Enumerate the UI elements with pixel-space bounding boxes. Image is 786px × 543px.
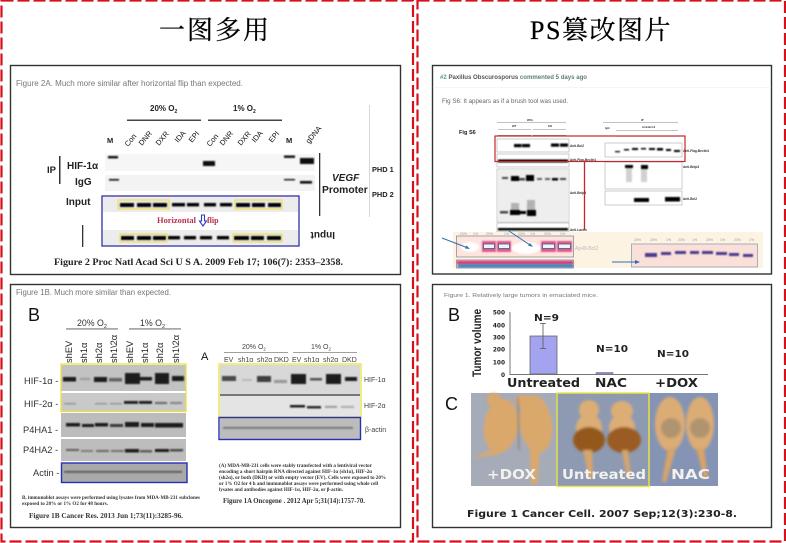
note A: or 1% O2 for 4 h and immunoblot assays were performed using whole cell (219, 481, 379, 487)
condition headers: DXR (154, 129, 171, 147)
blot: HIF-1α and IgG (105, 154, 315, 191)
blot labels: Input (310, 229, 335, 240)
blot labels: PHD 2 (372, 190, 394, 199)
frame: left dashed section (2, 0, 413, 542)
blot group B: 2 (104, 324, 107, 330)
condition headers: DNR (218, 129, 235, 147)
blot labels: VEGF (332, 173, 360, 184)
condition headers: EPI (267, 129, 281, 144)
western blot strips B (61, 365, 187, 482)
left blot stack: Anti-t-actin (570, 228, 587, 232)
y ticks (493, 310, 505, 379)
y ticks: 0 (501, 373, 505, 379)
enhanced image strip: 20% (460, 232, 467, 236)
blot group B: shEV (64, 340, 74, 363)
blot group A labels: sh2α (323, 357, 338, 364)
red highlight box and connector (495, 136, 685, 230)
left blot stack: IgG (605, 126, 610, 130)
note A (219, 462, 386, 493)
condition headers: 1% O (233, 104, 253, 113)
frame: right dashed section (418, 0, 785, 542)
enhanced image strip: 1% (504, 232, 509, 236)
category labels: Untreated (507, 376, 580, 390)
blot group A labels (224, 344, 386, 434)
note B: exposed to 20% or 1% O2 for 48 hours. (22, 501, 109, 507)
enhanced image strip: 20% (678, 238, 685, 242)
left blot stack: WT (512, 124, 517, 128)
blue box: input blots with flip (102, 196, 299, 246)
left blot stack: KO (548, 124, 553, 128)
condition headers: EPI (187, 129, 201, 144)
blot group A labels: 20% O (242, 344, 263, 351)
panel: Fig S6 comment (432, 66, 772, 274)
panel: Figure 1 mice (432, 284, 772, 528)
condition headers: 2 (253, 109, 256, 115)
photo: mice (471, 393, 718, 486)
y ticks: 300 (493, 336, 505, 342)
note A: lysates and antibodies against HIF-1α, HIF-2α, or β-actin. (219, 487, 344, 493)
condition headers: 2 (174, 109, 177, 115)
condition headers: Con (123, 132, 138, 148)
blot group A labels: 2 (263, 346, 266, 352)
condition headers: IDA (250, 129, 265, 144)
yellow highlight box (557, 393, 649, 486)
comment text: Fig S6: It appears as if a brush tool was used. (442, 98, 568, 105)
blot group A labels: sh1α (304, 357, 319, 364)
note A: (A) MDA-MB-231 cells were stably transfected with a lentiviral vector (219, 462, 373, 469)
arrows: blue annotations (442, 231, 640, 264)
panel: Figure 2A horizontal flip (10, 66, 400, 274)
condition headers: gDNA (304, 124, 323, 145)
left blot stack: Anti-Bnip3 (683, 165, 699, 169)
citation: Figure 1A: Figure 1A Oncogene . 2012 Apr 5;31(14):1757-70. (223, 498, 365, 505)
blot group A labels: sh1α (238, 357, 253, 364)
citation: Figure 1 Cancer Cell: Figure 1 Cancer Cell. 2007 Sep;12(3):230-8. (467, 509, 737, 520)
blot group A labels: β-actin (365, 427, 386, 434)
left blot stack: WCL (527, 118, 534, 122)
left blot stack: Anti-Flag-Beclin1 (570, 158, 596, 162)
enhanced image strip (453, 232, 763, 268)
note A: (sh2α), or both (DKD) or with empty vector (EV). Cells were exposed to 20% (219, 474, 386, 481)
bar: NAC (596, 372, 613, 374)
blot group B: sh2α (94, 342, 104, 363)
photo labels: +DOX (487, 467, 537, 483)
blot group A labels: sh2α (257, 357, 272, 364)
value labels: N=10 (657, 349, 689, 360)
blot group A labels: 2 (329, 346, 332, 352)
blot group A labels: EV (292, 357, 302, 364)
condition headers: IDA (173, 129, 188, 144)
citation: Figure 2: Figure 2 Proc Natl Acad Sci U S A. 2009 Feb 17; 106(7): 2353–2358. (54, 257, 344, 268)
value labels: N=9 (534, 313, 559, 324)
label Fig S6: Fig S6 (459, 130, 476, 136)
blot group B: sh1α (79, 342, 89, 363)
photo labels: Untreated (562, 467, 646, 483)
citation: Figure 1B: Figure 1B Cancer Res. 2013 Jun 1;73(11):3285-96. (29, 512, 183, 520)
blot labels: IP (47, 165, 57, 176)
enhanced image strip: 1% (530, 232, 535, 236)
note A: encoding a short hairpin RNA directed against HIF-1α (sh1α), HIF-2α (219, 468, 372, 475)
y ticks: 400 (493, 324, 505, 330)
blot group B (23, 318, 181, 478)
blot group A labels: HIF-1α (364, 377, 386, 384)
photo labels (487, 467, 710, 483)
condition headers: DXR (236, 129, 253, 147)
note B: B, immunoblot assays were performed using lysates from MDA-MB-231 subclones (22, 495, 200, 501)
blot labels: PHD 1 (372, 165, 394, 174)
blot labels (47, 153, 394, 247)
y ticks: 100 (493, 360, 505, 366)
blot group A labels: DKD (274, 357, 289, 364)
enhanced image strip: 1% (692, 238, 697, 242)
caption: Figure 2A: Figure 2A. Much more similar after horizontal flip than expected. (16, 79, 243, 88)
condition headers: 20% O (150, 104, 174, 113)
blot group B: 20% O (77, 318, 104, 328)
category labels: +DOX (655, 376, 699, 390)
condition headers: Con (205, 132, 220, 148)
panel letter B: B (448, 305, 460, 325)
panel letter C: C (445, 394, 458, 414)
enhanced image strip: 1% (720, 238, 725, 242)
enhanced image strip: 1% (749, 238, 754, 242)
condition headers: M (286, 136, 292, 145)
enhanced image strip: 20% (650, 238, 657, 242)
highlight boxes B (61, 364, 187, 482)
blot group B: 2 (162, 324, 165, 330)
blot group B: sh1α (140, 342, 150, 363)
flip label: Horizontal (157, 216, 197, 225)
y axis title: Tumor volume (470, 309, 484, 377)
heading: right column: PS篡改图片 (530, 16, 672, 45)
value labels: N=10 (596, 344, 628, 355)
left blot stack: Anti-Bcl2 (570, 144, 584, 148)
error bar (540, 323, 546, 348)
condition headers: M (107, 136, 113, 145)
panel letter A: A (201, 351, 209, 363)
enhanced image strip: 1% (560, 232, 565, 236)
enhanced image strip: 1% (473, 232, 478, 236)
left blot stack (497, 118, 709, 232)
enhanced image strip: Ap49-Bcl2 (575, 246, 598, 252)
blue box: input blots with flip: flip (207, 216, 219, 225)
left blot stack: Anti-Bcl-2 (642, 125, 656, 129)
blot group A labels: HIF-2α (364, 403, 386, 410)
bar: Untreated (530, 336, 557, 374)
category labels: NAC (595, 376, 627, 390)
blot group B: 1% O (140, 318, 162, 328)
icon: flip arrow (200, 215, 206, 226)
blot labels: IgG (75, 177, 92, 188)
western blot strips A (220, 365, 361, 439)
blot group A labels: 1% O (311, 344, 329, 351)
highlight boxes A (219, 364, 361, 440)
heading: left column: 一图多用 (159, 16, 271, 45)
yellow boxes (118, 200, 282, 242)
enhanced image strip: 20% (706, 238, 713, 242)
bar chart: tumor volume (470, 309, 708, 390)
enhanced image strip: 20% (734, 238, 741, 242)
condition headers: DNR (137, 129, 154, 147)
blot group B: HIF-1α - (24, 376, 58, 386)
panel: Figure 1B and 1A blots (10, 284, 400, 528)
blot group B: sh1\2α (109, 334, 119, 363)
enhanced image strip: 1% (666, 238, 671, 242)
blot group B: sh2α (155, 342, 165, 363)
blot group A labels: EV (224, 357, 234, 364)
y ticks: 500 (493, 310, 505, 316)
enhanced image strip: 20% (486, 232, 493, 236)
enhanced image strip: 20% (544, 232, 551, 236)
blot group B: P4HA2 - (23, 445, 58, 455)
note B (22, 495, 200, 507)
value labels (534, 313, 689, 360)
enhanced image strip: 20% (518, 232, 525, 236)
y ticks: 200 (493, 348, 505, 354)
category labels (507, 376, 699, 390)
enhanced image strip: 20% (634, 238, 641, 242)
blot labels: Promoter (322, 185, 368, 196)
blot group B: Actin - (33, 468, 59, 478)
blot group A labels: DKD (342, 357, 357, 364)
panel letter B: B (28, 305, 40, 325)
blot group B: P4HA1 - (23, 425, 58, 435)
blot group B: shEV (125, 340, 135, 363)
caption: Figure 1: Figure 1. Relatively large tumors in emaciated mice. (444, 293, 599, 299)
blot labels: Input (66, 197, 91, 208)
left blot stack: Anti-Bcl2 (683, 197, 697, 201)
comment header: #2 Paxillus Obscurosporus commented 5 days ago (440, 74, 587, 81)
caption: Figure 1B: Figure 1B. Much more similar than expected. (16, 288, 171, 297)
left blot stack: Anti-Flag-Beclin1 (683, 149, 709, 153)
photo labels: NAC (671, 467, 710, 483)
blot labels: HIF-1α (67, 161, 99, 172)
blot group B: HIF-2α - (24, 399, 58, 409)
left blot stack: Anti-Bnip3 (570, 191, 586, 195)
left blot stack: IP (641, 118, 644, 122)
blot group B: sh1\2α (171, 334, 181, 363)
condition headers (107, 104, 323, 148)
